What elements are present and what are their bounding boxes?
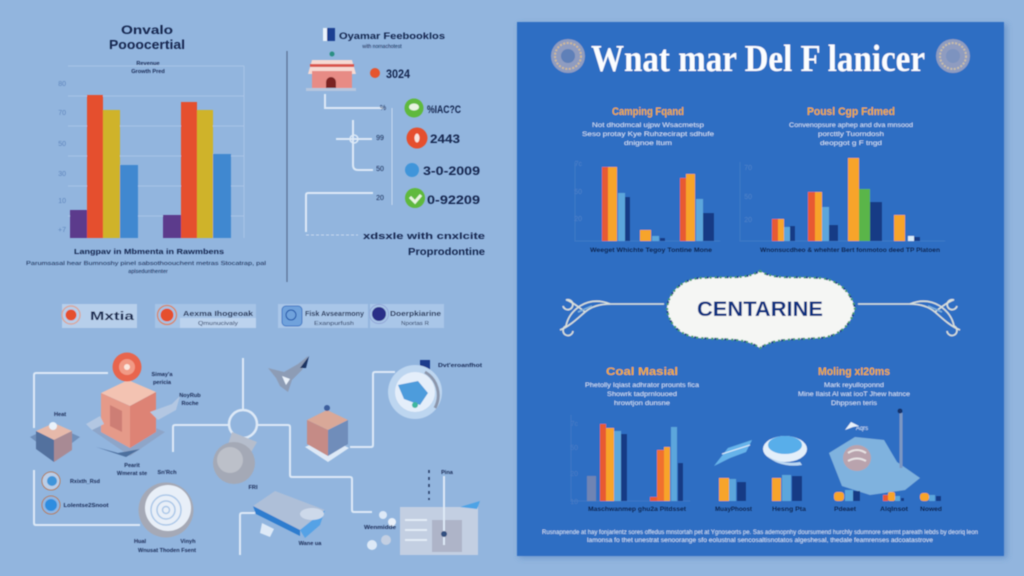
legend chip two: Qmunucivaly xyxy=(198,321,239,327)
stat: year: 3024 xyxy=(386,67,410,81)
section: coal text: hrowtjon dunsne xyxy=(614,400,671,407)
legend items: Lolentse2Snoot xyxy=(64,503,109,509)
icon: platform: FRI xyxy=(248,485,258,491)
icon: small building xyxy=(30,422,80,462)
chart plot: +7 xyxy=(58,227,66,234)
chart plot: 70 xyxy=(58,110,66,117)
disc labels xyxy=(134,539,196,554)
panel: timeline tree xyxy=(306,28,485,258)
chart: proud: 70 xyxy=(744,165,752,172)
section: proud text: porcttly Tuorndosh xyxy=(818,131,885,138)
chart title xyxy=(109,23,185,52)
legend chip four xyxy=(370,304,444,328)
chart: proud: 20 xyxy=(744,217,752,224)
chart: camping: 7c xyxy=(575,161,582,168)
stat: green item xyxy=(404,98,461,118)
tree connectors: 99 xyxy=(376,135,384,142)
panel shadow xyxy=(519,24,1007,558)
section: proud text: Convenopsure aphep and dva mnsood xyxy=(789,122,914,129)
chart: coal xyxy=(570,415,690,513)
legend chip one xyxy=(62,304,137,328)
tree caption: xdsxle with cnxlcite xyxy=(363,231,485,242)
chart caption: Parumsasal hear Bumnoshy pinel sabsothoouchent metras Stocatrap, pal xyxy=(26,261,266,267)
panel: what mar del xyxy=(517,22,1004,556)
chart caption: Langpav in Mbmenta in Rawmbens xyxy=(74,249,224,256)
legend chip two: Aexma Ihogeoak xyxy=(183,309,254,318)
chart: mini bars: Alqlnsot xyxy=(880,506,908,513)
section: coal text: Coal Masial xyxy=(606,366,678,378)
icon: disc xyxy=(138,482,194,538)
chart: camping xyxy=(574,161,720,254)
chart: coal: 20 xyxy=(570,471,578,478)
tree connectors: 50 xyxy=(376,166,384,173)
icon: shop xyxy=(306,52,356,91)
icon: machine: Pina xyxy=(441,470,454,476)
icon: machine: Wenmidde xyxy=(364,525,396,531)
chart plot: 10 xyxy=(58,198,66,205)
icon: globe: Dvt'eroanfhot xyxy=(438,363,482,369)
chart: group bars with icons xyxy=(714,436,807,513)
section: camping text: Seso protay Kye Ruhzecirapt sdhufe xyxy=(582,131,715,138)
icon: cube building xyxy=(305,405,349,462)
legend chip three: Fisk Avsearmony xyxy=(305,309,365,318)
network connectors xyxy=(34,358,395,555)
chart plot xyxy=(58,66,244,238)
chart: coal: Maschwanmep ghu2a Pitdsset xyxy=(588,506,686,513)
legend chip one: Mxtia xyxy=(90,309,134,323)
building labels: Pearit xyxy=(124,463,140,469)
icon: platform xyxy=(248,485,325,547)
network diagram xyxy=(30,352,482,555)
icon: map with pin: Aqrs xyxy=(856,426,868,432)
chart: proud xyxy=(740,158,945,254)
icon: blue fish xyxy=(714,440,752,466)
stat: red item: 2443 xyxy=(430,132,460,146)
chart: group bars with icons: Hesng Pta xyxy=(772,506,807,513)
chart: mini bars: Nowed xyxy=(920,506,942,513)
section: camping text: dnignoe ltum xyxy=(624,140,672,147)
stat: blue item xyxy=(405,163,480,178)
chart: coal: 50 xyxy=(570,445,578,452)
legend items: Rxixth_Rsd xyxy=(70,479,101,485)
tree header: with nornachotest xyxy=(362,44,402,50)
icon: gray ball xyxy=(213,432,257,484)
legend chip three xyxy=(278,304,368,328)
legend items xyxy=(42,472,109,514)
section: moling text xyxy=(798,366,911,407)
tree connectors: 20 xyxy=(376,195,384,202)
chart: coal: 10 xyxy=(570,499,578,506)
building labels: pericia xyxy=(153,380,172,386)
footer text: Rusnapnende at hay fonjarlentz sores offedus mnstortah pet at Ygnoseorts pe. Sas ademopnhy doursumend hurchly sdumnore seermt pareath lebds by deoriq leon xyxy=(542,529,978,536)
stat: green item: %IAC?C xyxy=(427,104,461,116)
chart: mini bars xyxy=(834,490,942,513)
building labels xyxy=(54,372,201,477)
icon: machine xyxy=(364,470,480,555)
section: camping text: Camping Fqand xyxy=(612,106,684,118)
chart subtitle: Growth Pred xyxy=(131,69,165,75)
section: coal text: Phetolly Iqiast adhrator prounts fica xyxy=(585,382,700,389)
chart: proud: 50 xyxy=(744,194,752,201)
footer text: lamonsa fo thet unestrat senoorange sfo eolustnal sencosaltisnotatos algeshesal, thedale feamrenses adcoatastrove xyxy=(587,537,934,544)
section: camping text: Not dhodmcal ujpw Wsacmetsp xyxy=(592,122,705,129)
tree header xyxy=(323,28,445,50)
building labels: Simay'a xyxy=(152,372,173,378)
tree header: Oyamar Feebooklos xyxy=(339,31,445,42)
legend chip four: Doerpkiarine xyxy=(390,309,441,318)
building labels: Wmerat ste xyxy=(117,471,147,477)
chart caption xyxy=(26,249,266,275)
legend chip three: Exanpurfush xyxy=(314,321,354,327)
divider line xyxy=(286,51,288,282)
chart subtitle: Revenue xyxy=(136,61,160,67)
section: moling text: Mine Ilaist Al wat iooT Jhew hatnce xyxy=(798,391,911,398)
section: proud text xyxy=(789,106,914,147)
section: moling text: Moling xI20ms xyxy=(818,366,890,378)
left panel: grouped bar chart xyxy=(26,23,266,275)
section: moling text: Mark reyulloponnd xyxy=(824,382,885,389)
tree connectors xyxy=(306,94,392,235)
stat: year xyxy=(370,67,410,81)
chart: group bars with icons: MuayPhoost xyxy=(715,506,752,513)
building labels: NoyRub xyxy=(179,393,201,399)
chart title: Onvalo xyxy=(121,23,173,37)
icon: left medallion xyxy=(551,39,585,73)
disc labels: Hual xyxy=(134,539,147,545)
chart subtitle xyxy=(131,61,165,75)
chart title: Pooocertial xyxy=(109,37,185,52)
footer text xyxy=(542,529,978,544)
legend row xyxy=(62,304,444,328)
tree caption: Proprodontine xyxy=(408,246,485,258)
banner plaque xyxy=(667,271,855,348)
icon: globe xyxy=(388,360,482,419)
building labels: Heat xyxy=(54,412,66,418)
chart: mini bars: Pdeaet xyxy=(834,506,856,513)
section: proud text: Pousl Cgp Fdmed xyxy=(807,106,895,118)
icon: main building xyxy=(86,352,180,457)
chart plot: 30 xyxy=(58,171,66,178)
icon: winged object xyxy=(268,356,309,392)
section: camping text xyxy=(582,106,715,147)
icon: platform: Wane ua xyxy=(299,541,322,547)
section: moling text: Dhppsen teris xyxy=(831,400,877,407)
disc labels: Vinyh xyxy=(180,539,196,545)
tree connectors: % xyxy=(380,105,386,112)
icon: map with pin xyxy=(829,408,920,495)
icon: right medallion xyxy=(936,39,970,73)
banner plaque: CENTARINE xyxy=(697,298,823,321)
chart: camping: 50 xyxy=(574,189,582,196)
chart plot: 80 xyxy=(58,81,66,88)
legend chip two xyxy=(155,304,256,328)
chart: coal: 7c xyxy=(571,421,578,428)
building labels: Sn'Rch xyxy=(157,470,177,476)
stat: green item two: 0-92209 xyxy=(427,195,480,207)
chart caption: aplsedunthenter xyxy=(128,269,168,275)
stat: green item two xyxy=(405,188,480,208)
icon: blue bowl xyxy=(763,436,807,466)
section: coal text: Showrk tadprnlouoed xyxy=(607,391,678,398)
banner ornament right xyxy=(858,300,960,336)
stat: red item xyxy=(406,128,460,148)
chart plot: 50 xyxy=(58,141,66,148)
banner ornament left xyxy=(560,300,664,336)
chart: camping: 20 xyxy=(574,216,582,223)
stat: blue item: 3-0-2009 xyxy=(423,166,480,178)
main title: Wnat mar Del F lanicer xyxy=(591,38,925,80)
building labels: Roche xyxy=(181,401,199,407)
tree caption xyxy=(363,231,485,258)
legend chip four: Nportas R xyxy=(401,321,429,327)
chart: camping: Weeget Whichte Tegoy Tontine Mone xyxy=(590,247,713,254)
section: coal text xyxy=(585,366,700,407)
chart: proud: Wnonsucdheo & whehter Bert fonmotoo deed TP Platoen xyxy=(760,247,940,254)
disc labels: Wnusat Thoden Fsent xyxy=(138,548,196,554)
section: proud text: deopgot g F tngd xyxy=(820,140,883,147)
